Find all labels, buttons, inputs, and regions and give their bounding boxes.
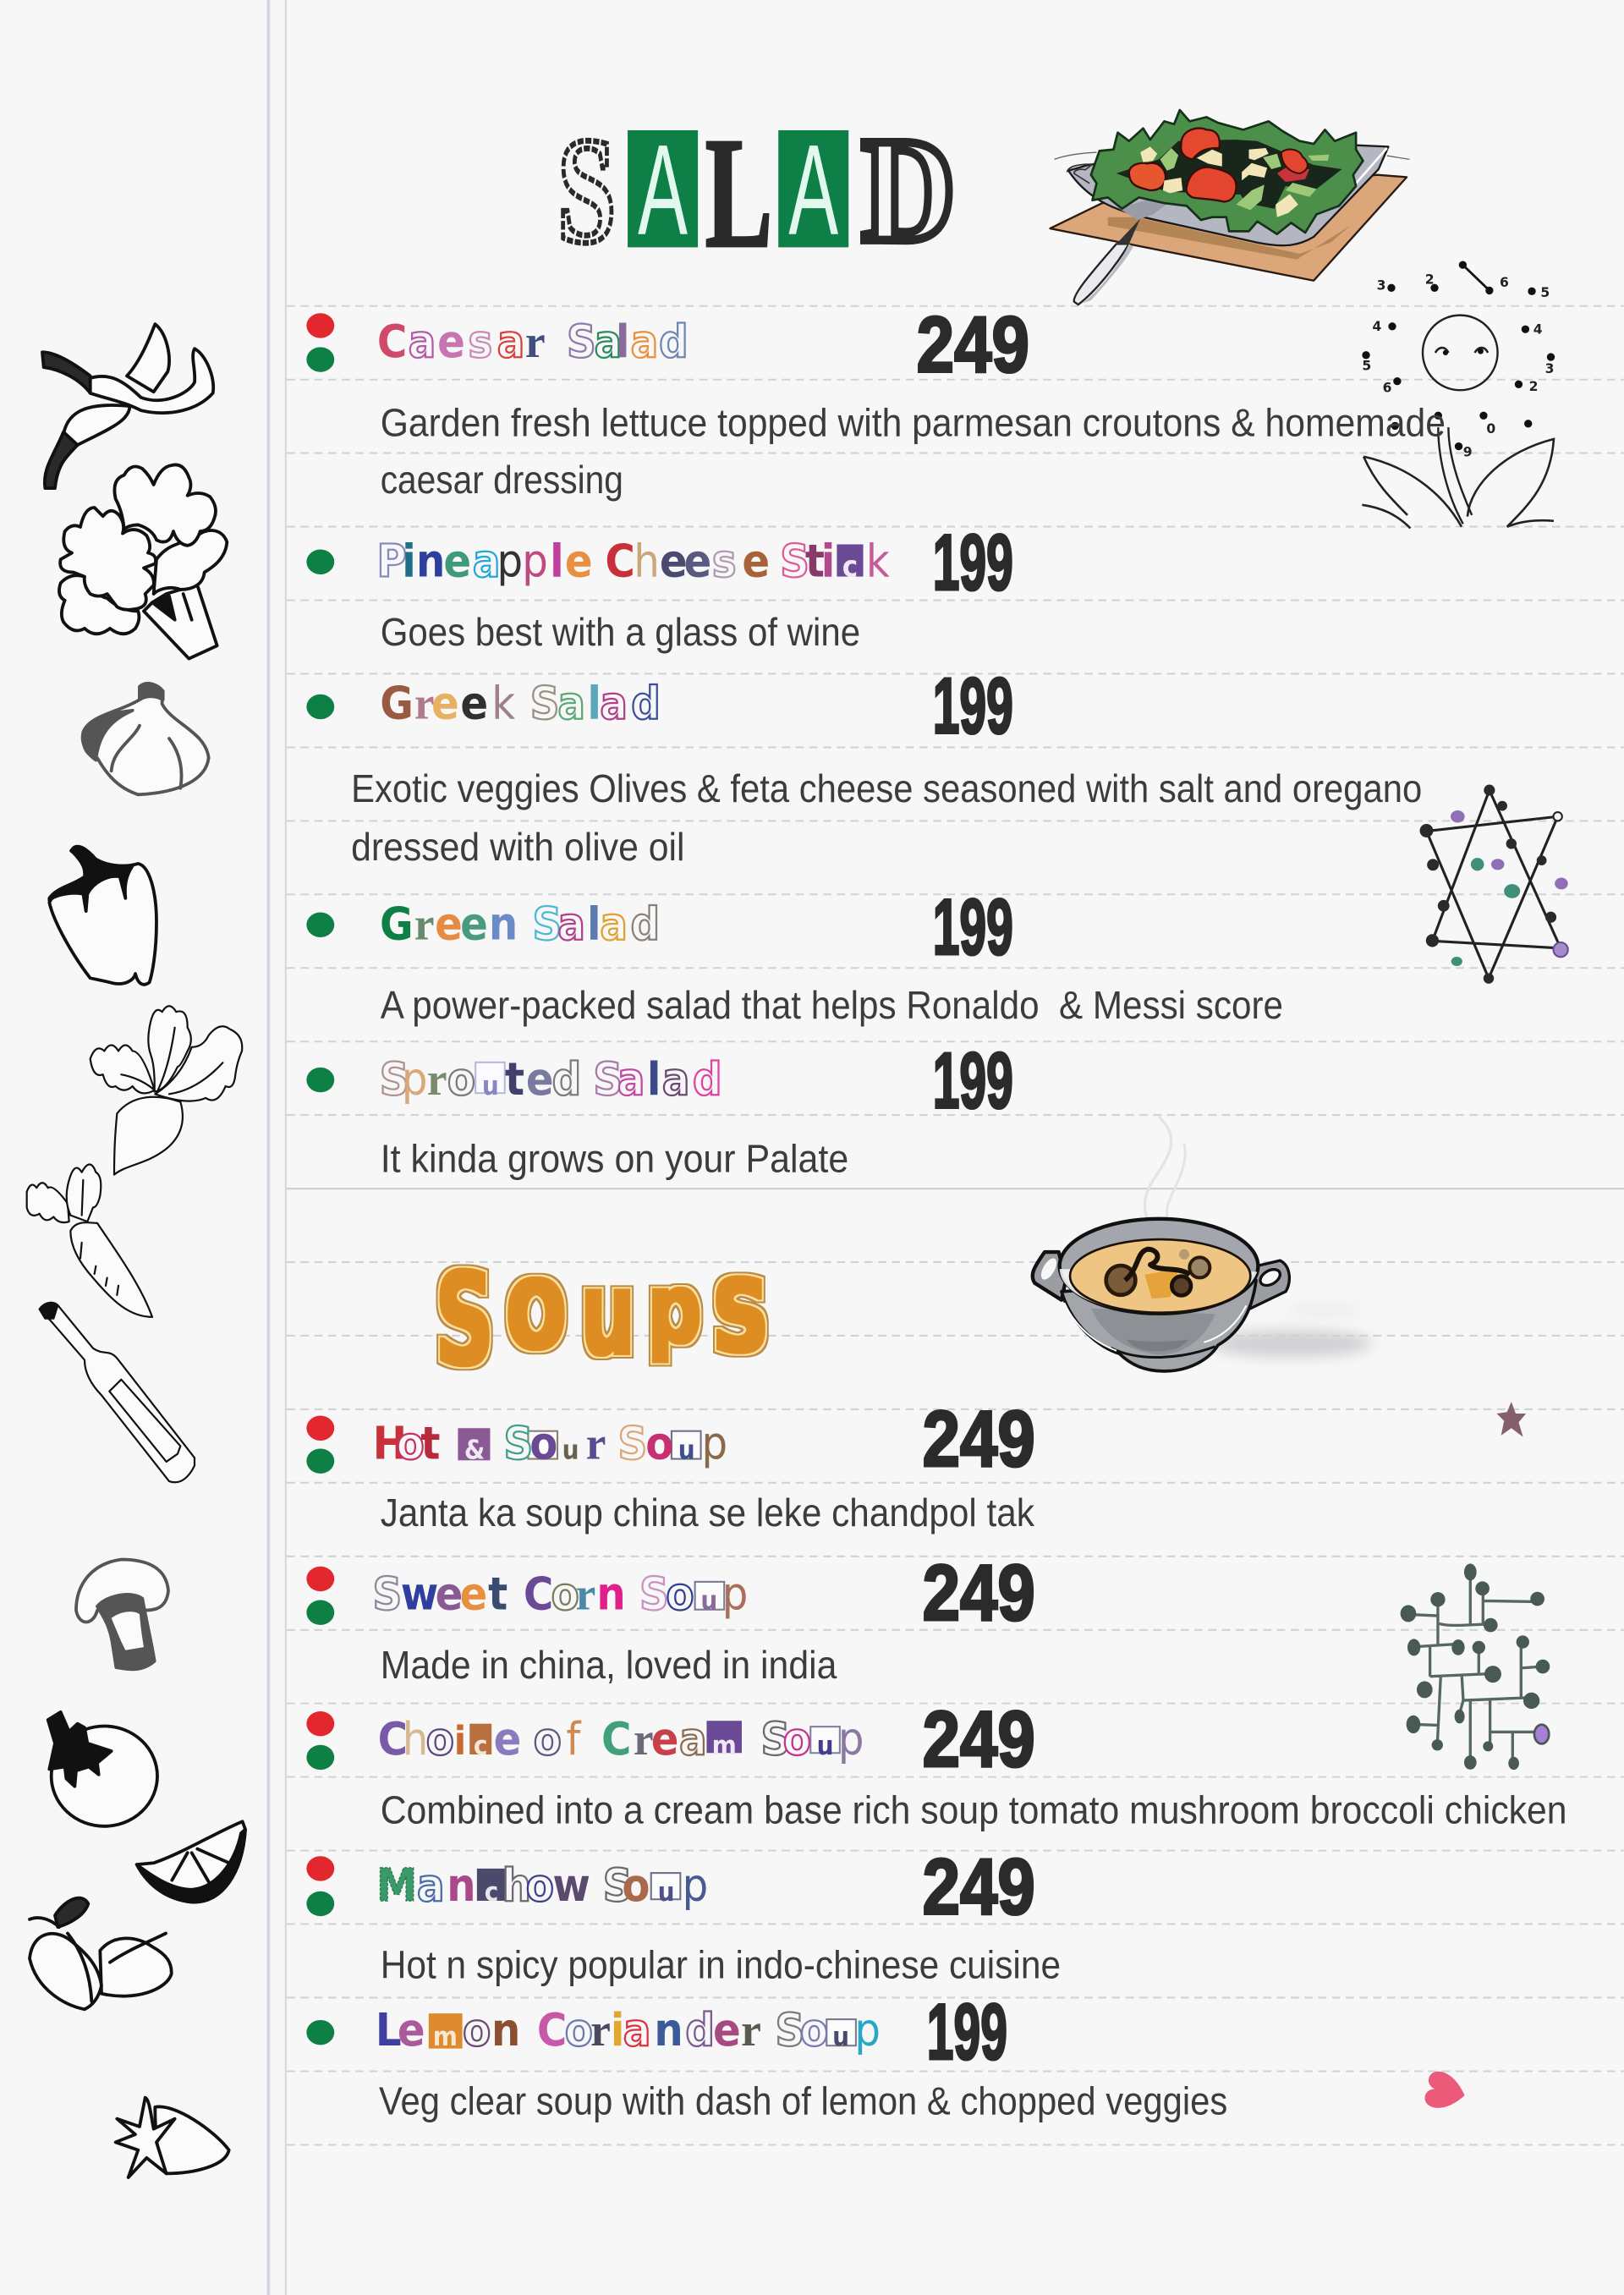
decoration: dot-to-dot flower: 0 [1486,421,1495,436]
item name: Caesar Salad [377,315,689,368]
price: 199 [927,1987,1007,2076]
menu item: Hot & Sour Soup [306,1394,1035,1535]
icon: broccoli [59,464,227,659]
item name: Sweet Corn So up [372,1568,748,1621]
description: dressed with olive oil [351,825,685,869]
icon: orange slice [137,1821,245,1902]
circuit doodle [1401,1563,1550,1770]
icon: carrot [27,1165,152,1317]
veg marker [306,2020,334,2045]
heading: Soups: p [647,1254,701,1364]
veg marker [306,550,334,574]
description: caesar dressing [381,458,623,502]
illustration: soup bowl [1033,1117,1373,1371]
decoration: dot-to-dot flower: 4 [1372,319,1381,334]
veg and non-veg markers [306,1711,334,1770]
decoration: dot-to-dot flower: 9 [1463,445,1473,460]
description: It kinda grows on your Palate [381,1137,848,1181]
price: 199 [933,882,1013,971]
decoration: star of dots [1420,785,1568,984]
small heart [1423,2069,1468,2113]
item name: Le mon Coriander So up [376,2003,881,2056]
decoration: dot-to-dot flower: 3 [1545,361,1554,376]
small star [1497,1402,1526,1437]
price: 249 [923,1842,1035,1931]
decoration: dot-to-dot flower: 6 [1500,275,1509,290]
item name: Man chow So u p [376,1859,708,1912]
menu item: Sprouted Salad [306,1035,1013,1181]
icon: tomato [48,1712,157,1826]
description: Made in china, loved in india [381,1643,837,1687]
icon: oil bottle [40,1303,195,1482]
menu item: Greek Salad [306,662,1422,869]
item name: Choi ce of Crea m So up [378,1712,864,1765]
menu item: Manchow Soup [306,1842,1061,1987]
veg marker [306,695,334,719]
price: 199 [933,518,1013,607]
veg marker [306,1068,334,1092]
veg and non-veg markers [306,313,334,372]
price: 249 [923,1394,1035,1483]
veg and non-veg markers [306,1567,334,1625]
description: Hot n spicy popular in indo-chinese cuisine [381,1943,1061,1987]
description: Veg clear soup with dash of lemon & chopped veggies [379,2079,1227,2123]
icon: bell pepper [49,847,156,985]
heading: Salad: A [638,118,688,262]
veg marker [306,913,334,937]
icon: plums [30,1898,172,2009]
decoration: dot-to-dot flower: 5 [1362,359,1371,374]
heading: Salad: S [557,106,616,274]
decoration: dot-to-dot flower: 4 [1533,321,1543,337]
heading: Salad [557,106,956,281]
description: A power-packed salad that helps Ronaldo & Messi score [381,983,1283,1027]
description: Goes best with a glass of wine [381,610,860,654]
price: 249 [923,1694,1035,1783]
icon: beetroot [91,1006,242,1175]
price: 249 [917,299,1029,388]
heading: Salad: L [705,107,772,281]
heading: Salad: D [862,108,956,273]
heading: Salad: A [788,118,838,262]
heading: Soups: o [506,1233,567,1377]
veg and non-veg markers [306,1416,334,1474]
menu item: Pineapple Cheese Stick [306,518,1013,654]
heading: Soups [436,1229,768,1394]
decoration: dot-to-dot flower: 2 [1529,379,1538,394]
menu item: Green Salad [306,882,1283,1027]
item name: Hot & So u r So up [373,1417,727,1470]
description: Exotic veggies Olives & feta cheese seasoned with salt and oregano [351,766,1422,810]
heading: Soups: s [712,1229,768,1382]
icon: mushroom [76,1560,168,1669]
illustration: salad plate [1050,110,1409,305]
price: 249 [923,1548,1035,1637]
menu item: Choice of Cream Soup [306,1694,1567,1831]
item name: Pineapple Cheese Sti c k [377,535,890,588]
decoration: dot-to-dot flower: 2 [1425,272,1435,288]
icon: strawberry [116,2098,229,2177]
description [381,401,1446,502]
menu item: Sweet Corn Soup [306,1548,1035,1687]
description [351,766,1422,869]
decoration: dot-to-dot flower: 5 [1540,285,1550,300]
heading: Soups: S [436,1246,494,1394]
description: Garden fresh lettuce topped with parmesan croutons & homemade [381,401,1446,445]
price: 199 [933,1035,1013,1124]
decoration: dot-to-dot flower [1362,261,1555,528]
icon column: vegetables [27,324,245,2177]
decoration: dot-to-dot flower: 6 [1383,381,1391,396]
item name: Greek Salad [380,676,661,729]
heading: Soups: u [581,1247,635,1381]
icon: garlic [83,684,209,794]
icon: chilli [42,324,213,488]
veg and non-veg markers [306,1856,334,1916]
item name: Green Salad [380,898,660,951]
item name: Spro uted Salad [380,1052,722,1106]
decoration: dot-to-dot flower: 3 [1377,278,1386,294]
menu item: Lemon Coriander Soup [306,1987,1227,2123]
description: Janta ka soup china se leke chandpol tak [381,1491,1035,1535]
menu item: Caesar Salad [306,299,1446,502]
price: 199 [933,662,1013,750]
